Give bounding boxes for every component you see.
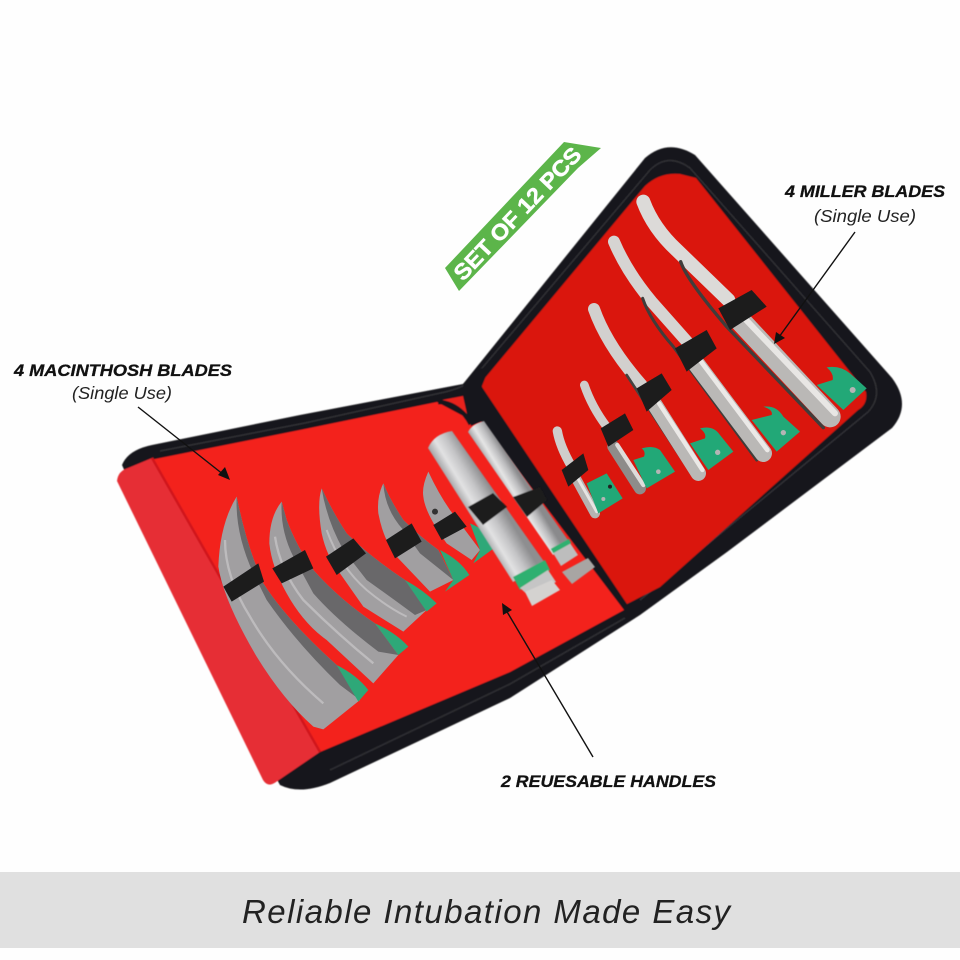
miller blade 2 [584, 385, 675, 488]
arrow: macintosh [138, 407, 230, 480]
blade 5 [423, 472, 498, 563]
zipper tape highlights [160, 160, 877, 770]
page divider strap [438, 366, 490, 426]
label: macintosh blades: 4 MACINTHOSH BLADES [13, 361, 233, 380]
badge text: SET OF 12 PCS [448, 142, 586, 285]
blade 1 [218, 497, 368, 729]
miller blade 4 [614, 242, 800, 460]
thin handle [468, 421, 595, 584]
footer band [0, 872, 960, 948]
case black shell [122, 147, 902, 790]
blade 4 [378, 483, 469, 592]
arrow: miller [774, 232, 855, 344]
miller blade 5 [643, 202, 867, 428]
arrow: handles [502, 603, 593, 757]
label: macintosh blades [13, 361, 233, 403]
label: macintosh blades: (Single Use) [72, 383, 172, 403]
right page red lining [480, 174, 866, 604]
footer tagline: Reliable Intubation Made Easy [242, 893, 732, 930]
miller blades [557, 202, 867, 513]
left page red lining [150, 402, 624, 752]
thick handle [428, 431, 560, 606]
miller blade 1 [557, 431, 623, 513]
zip case [117, 147, 902, 790]
label: miller blades: (Single Use) [814, 206, 916, 226]
macintosh blades [218, 472, 498, 729]
label: reusable handles: 2 REUESABLE HANDLES [500, 772, 717, 791]
blade 2 [269, 502, 408, 683]
badge: set of 12 pcs [445, 142, 601, 291]
folded red flap [117, 458, 320, 785]
blade 3 [319, 488, 437, 632]
miller blade 3 [594, 309, 733, 477]
label: miller blades [784, 182, 946, 226]
label: miller blades: 4 MILLER BLADES [784, 182, 946, 201]
reusable handles [428, 421, 595, 606]
